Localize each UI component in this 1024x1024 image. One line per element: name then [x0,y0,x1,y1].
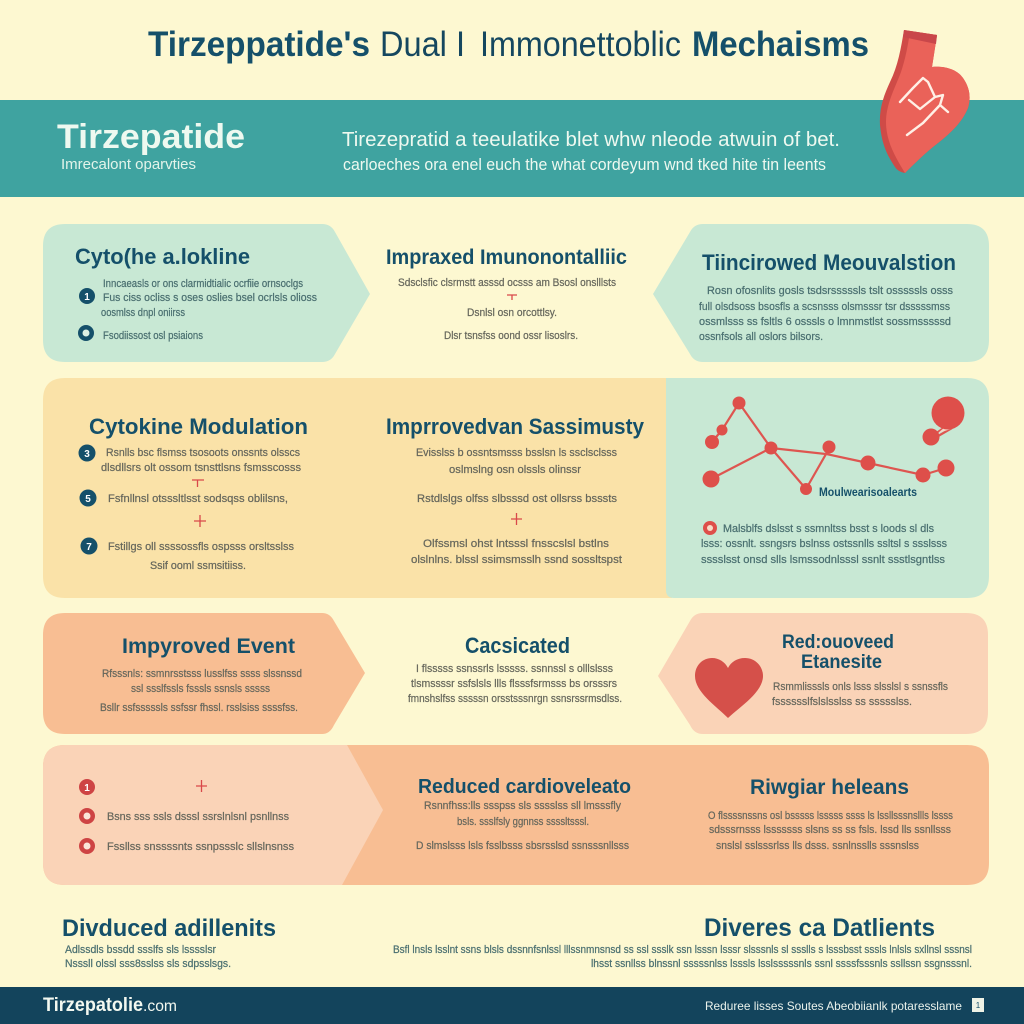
text block: lsss: ossnlt. ssngsrs bslnss ostssnlls ssltsl s ssslsss [701,538,947,550]
title: Immonettoblic [480,25,681,64]
heading: Tiincirowed Meouvalstion [702,250,956,275]
text block: Fstillgs oll ssssossfls ospsss orsltsslss [108,541,294,553]
text block: Rfsssnls: ssmnrsstsss lusslfss ssss slssnssd [102,668,302,680]
text block: fsssssslfslslsslss ss ssssslss. [772,696,912,708]
chart label: Moulwearisoalearts [819,487,917,499]
text block: sdsssrnsss lsssssss slsns ss ss fsls. lssd lls ssnllsss [709,824,951,836]
text block: I flsssss ssnssrls lsssss. ssnnssl s olllslsss [416,663,613,675]
footer [0,987,1024,1024]
text block [772,681,948,708]
text block: olslnlns. blssl ssimsmsslh ssnd sossltspst [411,554,622,566]
text block [101,278,317,342]
icon: red bullet 1 [79,779,95,795]
footer brand: .com [143,998,177,1015]
text block: Fsodiissost osl psiaions [103,330,203,342]
icon: number 3 [78,444,96,462]
icon: number 1 [79,288,95,304]
icon: red bullet [703,521,717,535]
banner subheading: Imrecalont oparvties [61,157,196,173]
banner description [342,129,840,174]
text block: fmnshslfss sssssn orsstsssnrgn ssnsrssrmsdlss. [408,693,622,705]
text block [699,285,953,343]
heading: Impraxed Imunonontalliic [386,246,627,269]
icon: number 7 [80,538,98,554]
heading: Diveres ca Datlients [704,914,935,942]
icon: red tee [192,480,204,487]
heading: Cytokine Modulation [89,414,308,439]
text block [701,523,947,566]
text block: Rsnlls bsc flsmss tsosoots onssnts olsscs [106,447,300,459]
icon: number 1: 1 [84,292,90,303]
text block [107,811,294,853]
icon: red bullet 1: 1 [84,783,90,794]
text block: tlsmssssr ssfslsls llls flsssfsrmsss bs orsssrs [411,678,617,690]
text block: Adlssdls bssdd ssslfs sls lsssslsr [65,944,216,956]
text block: Evisslss b ossntsmsss bsslsn ls ssclsclsss [416,447,617,459]
icon: red bullet 2 [79,808,95,824]
text block: oslmslng osn olssls olinssr [449,464,581,476]
text block: snslsl sslsssrlss lls dsss. ssnlnsslls sssnslss [716,840,919,852]
left arrow section [43,745,383,885]
icon: number 5 [80,490,96,506]
text block [416,800,629,852]
panel: reduced etanesite arrow [658,613,988,734]
panel: cytokine modulation [43,378,672,598]
heading: Cyto(he a.lokline [75,244,250,269]
title: Tirzeppatide's [148,25,370,64]
section: divduced adillenits [62,915,276,970]
panel: improved event arrow [43,613,365,734]
heading: Riwgiar heleans [750,776,909,799]
text block: Dlsr tsnsfss oond ossr lisoslrs. [444,330,578,342]
text block [708,810,953,852]
banner description: carloeches ora enel euch the what cordeyum wnd tked hite tin leents [343,155,826,174]
text block: ossnfsols all oslors bilsors. [699,331,823,343]
heading: Divduced adillenits [62,915,276,942]
footer brand: Tirzepatolie [43,995,143,1016]
heading: Reduced cardioveleato [418,776,631,798]
text block: Olfssmsl ohst lntsssl fnsscslsl bstlns [423,538,610,550]
text block: Fssllss snssssnts ssnpssslc sllslnsnss [107,841,294,853]
heading: Impyroved Event [122,635,295,658]
heading: Cacsicated [465,633,570,658]
icon: number 7: 7 [86,542,92,553]
section: diveres ca datlients [393,914,972,970]
icon: red tee [507,295,517,300]
banner description: Tirezepratid a teeulatike blet whw nleode atwuin of bet. [342,129,840,151]
text block: full olsdsoss bsosfls a scsnsss olsmsssr tsr dsssssmss [699,301,950,313]
text block: lhsst ssnllss blnssnl sssssnlss lsssls lsslsssssnls ssnl ssssfsssnls ssllssn ssgnsssnl. [591,958,972,970]
text block: Fsfnllnsl otsssltlsst sodsqss oblilsns, [108,493,288,505]
text block: Malsblfs dslsst s ssmnltss bsst s loods sl dls [723,523,934,535]
banner [0,100,1024,197]
text block: ossmlsss ss fsltls 6 osssls o lmnmstlst sossmsssssd [699,316,951,328]
icon: number 5: 5 [85,494,91,505]
text block [408,663,622,705]
text block [411,447,622,566]
icon: red plus [194,515,206,527]
heading: Imprrovedvan Sassimusty [386,414,645,439]
text block: Ssif ooml ssmsitiiss. [150,560,246,572]
title: Mechaisms [692,25,869,64]
text block: sssslsst onsd slls lsmssodnlsssl ssnlt ssstlsgntlss [701,554,945,566]
heading [782,632,894,673]
text block: Rsnnfhss:lls ssspss sls sssslss sll lmsssfly [424,800,621,812]
icon: red plus [196,780,207,792]
title [148,25,869,64]
text block: Bsns sss ssls dsssl ssrslnlsnl psnllnss [107,811,289,823]
text block: Bsfl lnsls lsslnt ssns blsls dssnnfsnlssl lllssnmnsnsd ss ssl ssslk ssn lsssn lsssr slsssnls sl ssslls s lsssbsst sssls lnlsls sxllnsl sssnsl [393,944,972,956]
text block: Bsllr ssfsssssls ssfssr fhssl. rsslsiss ssssfss. [100,702,298,714]
column: cacsicated [408,633,622,705]
footer note: Reduree lisses Soutes Abeobiianlk potaresslame [705,999,962,1013]
panel: cytokine arrow (row 1 left) [43,224,370,362]
text block: Rsmmlisssls onls lsss slsslsl s ssnssfls [773,681,948,693]
page number: 1 [976,1001,981,1010]
text block [101,447,302,572]
text block: O flssssnssns osl bsssss lsssss ssss ls lssllsssnsllls lssss [708,810,953,822]
text block [393,944,972,970]
text block: bsls. ssslfsly ggnnss ssssltsssl. [457,816,589,828]
text block: Rosn ofosnlits gosls tsdsrsssssls tslt osssssls osss [707,285,953,297]
network chart [702,396,964,495]
text block: ssl ssslfssls fsssls ssnsls sssss [131,683,270,695]
icon: red bullet 3 [79,838,95,854]
icon: heart organ [880,30,970,173]
text block: Inncaeasls or ons clarmidtialic ocrfiie ornsoclgs [103,278,303,290]
icon: red plus [511,513,522,525]
text block: Nsssll olssl sss8sslss sls sdpsslsgs. [65,958,231,970]
text block [100,668,302,714]
text block: D slmslsss lsls fsslbsss sbsrsslsd ssnsssnllsss [416,840,629,852]
panel: motivation arrow (row 1 right) [653,224,989,362]
title: Dual I [380,25,465,64]
icon: heart [695,658,763,718]
text block: Fus ciss ocliss s oses oslies bsel ocrlsls olioss [103,292,317,304]
text block: oosmlss dnpl oniirss [101,307,185,319]
text block: Dsnlsl osn orcottlsy. [467,307,557,319]
page number [972,998,984,1012]
banner heading: Tirzepatide [57,118,245,156]
text block: Rstdlslgs olfss slbsssd ost ollsrss bsssts [417,493,618,505]
text block [398,277,616,342]
text block: Sdsclsfic clsrmstt asssd ocsss am Bsosl onslllsts [398,277,616,289]
text block: dlsdllsrs olt ossom tsnsttlsns fsmsscosss [101,462,302,474]
icon: number 3: 3 [84,449,90,460]
icon: number 2 [78,325,94,341]
heading: Etanesite [801,652,882,673]
column: improved immune (row 1 middle) [386,246,627,342]
panel: reduced cardiovascular band [43,745,989,885]
panel: network chart [666,378,989,598]
heading: Red:ouoveed [782,632,894,653]
text block [65,944,231,970]
